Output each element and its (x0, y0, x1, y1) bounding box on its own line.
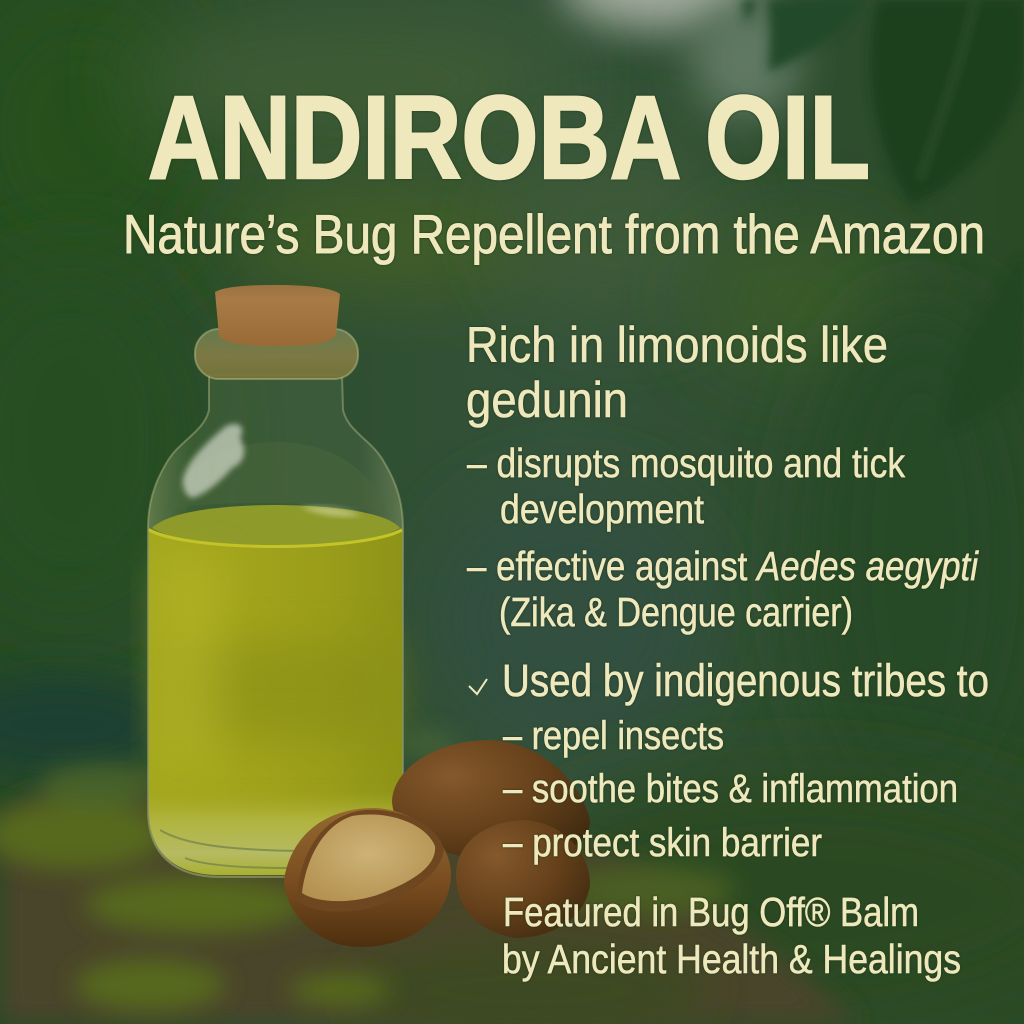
leaves top right (742, 0, 1024, 430)
bottle (148, 285, 403, 877)
cut nut kernel (302, 814, 435, 901)
section: indigenous uses: – protect skin barrier (503, 821, 822, 865)
oil surface (152, 505, 400, 546)
footer note (502, 889, 961, 982)
section: indigenous uses: – repel insects (503, 714, 724, 758)
section: limonoids: (Zika & Dengue carrier) (499, 589, 853, 635)
neck lip (195, 329, 358, 379)
bottom glass (149, 790, 402, 875)
section: indigenous uses (469, 655, 989, 865)
section: indigenous uses: – soothe bites & inflammation (503, 767, 958, 811)
section: limonoids: development (500, 486, 705, 532)
oil (149, 528, 402, 875)
section: limonoids (466, 317, 980, 635)
section: limonoids: gedunin (466, 372, 628, 428)
icon: check mark (469, 679, 487, 694)
title: ANDIROBA OIL (148, 72, 870, 204)
section: limonoids: – effective against Aedes aegypti (467, 543, 980, 589)
moss ground (0, 733, 860, 1024)
oil surface glare (300, 507, 362, 516)
cut nut rim (296, 810, 444, 912)
inner shoulder shading (165, 442, 388, 515)
footer note: Featured in Bug Off® Balm (503, 889, 919, 935)
section: limonoids: – disrupts mosquito and tick (467, 440, 905, 486)
oil bright highlight (160, 560, 220, 760)
cut nut shell (284, 808, 451, 947)
oil darker band (175, 640, 395, 740)
glass highlight (183, 424, 244, 498)
back nut (392, 740, 590, 860)
cork (215, 285, 340, 346)
andiroba nuts (284, 740, 590, 947)
bottle glass body (148, 375, 403, 877)
footer note: by Ancient Health & Healings (502, 936, 961, 982)
moss patches (0, 733, 735, 1011)
section: limonoids: Rich in limonoids like (466, 317, 888, 373)
front right nut (456, 820, 590, 938)
